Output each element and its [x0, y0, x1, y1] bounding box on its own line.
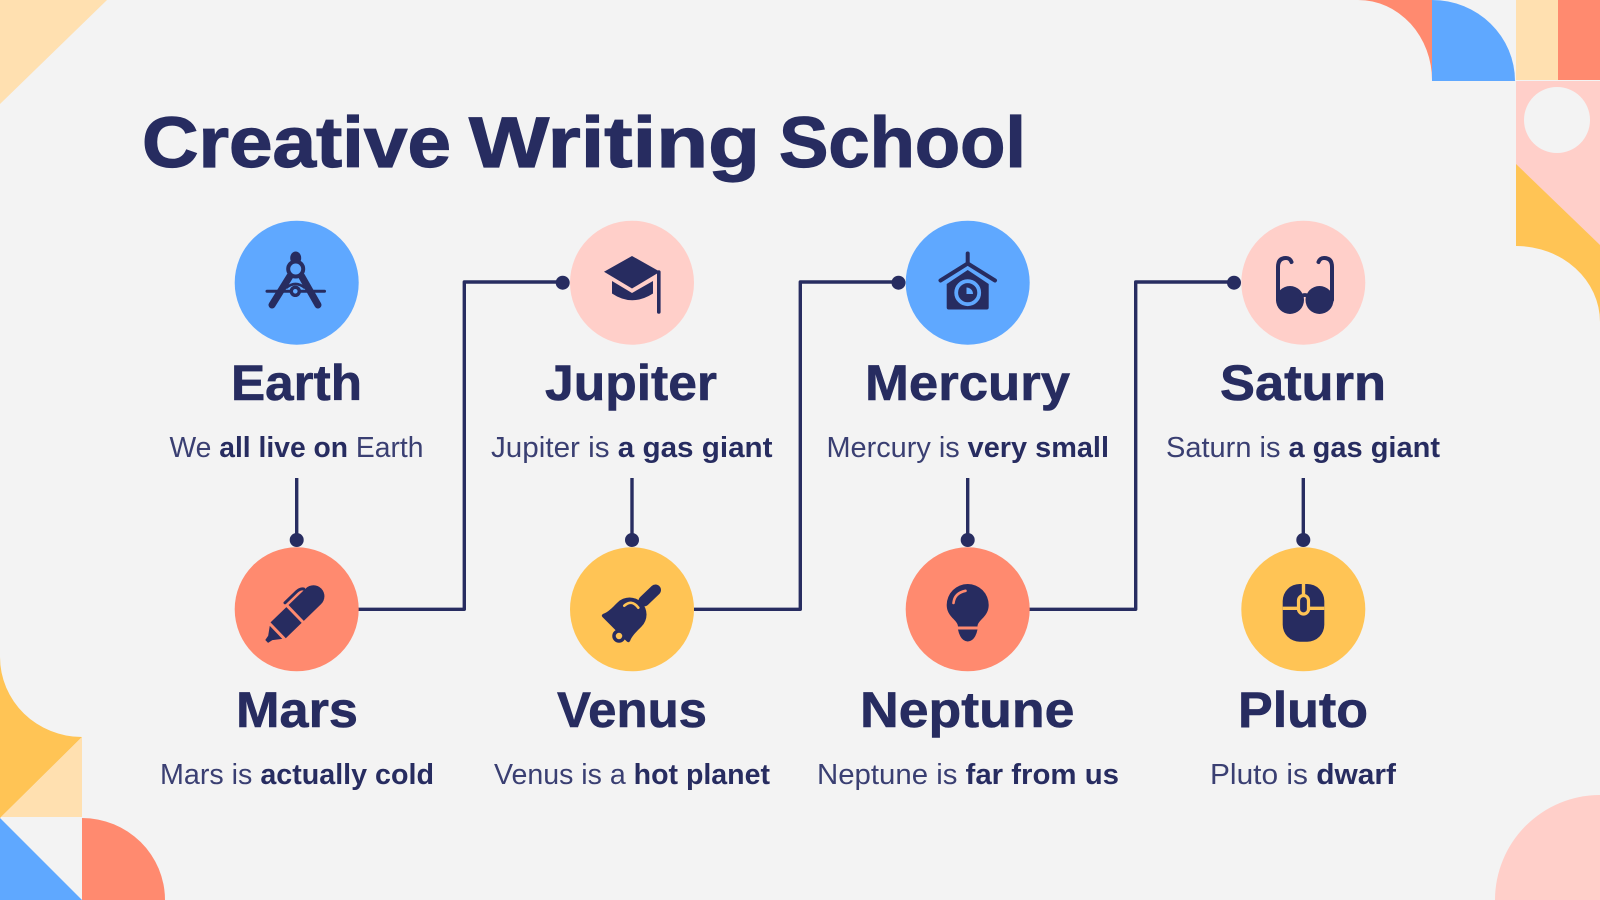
- connector: Mercury to Neptune: [961, 478, 975, 547]
- description: Mars: Mars is actually cold: [160, 759, 434, 791]
- circle: Mars: [235, 547, 359, 671]
- connector: Venus to Mercury: [694, 276, 906, 609]
- node: Jupiter: [491, 221, 773, 464]
- icon: light bulb: [947, 584, 989, 642]
- node: Saturn: [1166, 221, 1441, 464]
- connector: Mars to Jupiter: [358, 276, 570, 609]
- decoration: top left triangle: [0, 0, 107, 104]
- description: Neptune: Neptune is far from us: [817, 759, 1119, 791]
- description: Mercury: Mercury is very small: [826, 432, 1109, 464]
- icon: drawing compass: [267, 252, 324, 305]
- description: Jupiter: Jupiter is a gas giant: [491, 432, 773, 464]
- connector: Neptune to Saturn: [1029, 276, 1241, 609]
- name: Earth: Earth: [231, 355, 362, 411]
- icon: hand bell: [601, 589, 656, 643]
- node: Pluto: [1210, 547, 1397, 791]
- description: Venus: Venus is a hot planet: [494, 759, 771, 791]
- icon: computer mouse: [1283, 584, 1324, 642]
- node: Mercury: [826, 221, 1109, 464]
- circle: Neptune: [906, 547, 1030, 671]
- title: Creative: [142, 104, 451, 183]
- decoration: bottom right quarter circle: [1495, 795, 1600, 900]
- icon: graduation cap: [604, 256, 660, 312]
- name: Neptune: Neptune: [860, 682, 1074, 738]
- name: Jupiter: Jupiter: [545, 355, 717, 411]
- icon: pen: [256, 578, 329, 649]
- name: Mercury: Mercury: [865, 355, 1070, 411]
- node: Neptune: [817, 547, 1119, 791]
- icon: cuckoo clock house: [940, 254, 995, 310]
- name: Mars: Mars: [236, 682, 358, 738]
- connector: Saturn to Pluto: [1296, 478, 1310, 547]
- circle: Venus: [570, 547, 694, 671]
- decoration: bottom left shapes: [0, 657, 165, 900]
- connector: Earth to Mars: [290, 478, 304, 547]
- node: Mars: [160, 547, 434, 791]
- circle: Earth: [235, 221, 359, 345]
- title: School: [779, 104, 1026, 183]
- name: Venus: Venus: [557, 682, 707, 738]
- name: Saturn: Saturn: [1220, 355, 1386, 411]
- circle: Mercury: [906, 221, 1030, 345]
- title: Writing: [469, 104, 760, 183]
- icon: glasses: [1276, 258, 1334, 314]
- circle: Pluto: [1241, 547, 1365, 671]
- decoration: top right shapes: [1358, 0, 1600, 322]
- description: Pluto: Pluto is dwarf: [1210, 759, 1397, 791]
- description: Saturn: Saturn is a gas giant: [1166, 432, 1441, 464]
- node: Earth: [170, 221, 424, 464]
- name: Pluto: Pluto: [1238, 682, 1368, 738]
- description: Earth: We all live on Earth: [170, 432, 424, 464]
- circle: Jupiter: [570, 221, 694, 345]
- node: Venus: [494, 547, 771, 791]
- title: [142, 104, 1026, 183]
- circle: Saturn: [1241, 221, 1365, 345]
- connector: Jupiter to Venus: [625, 478, 639, 547]
